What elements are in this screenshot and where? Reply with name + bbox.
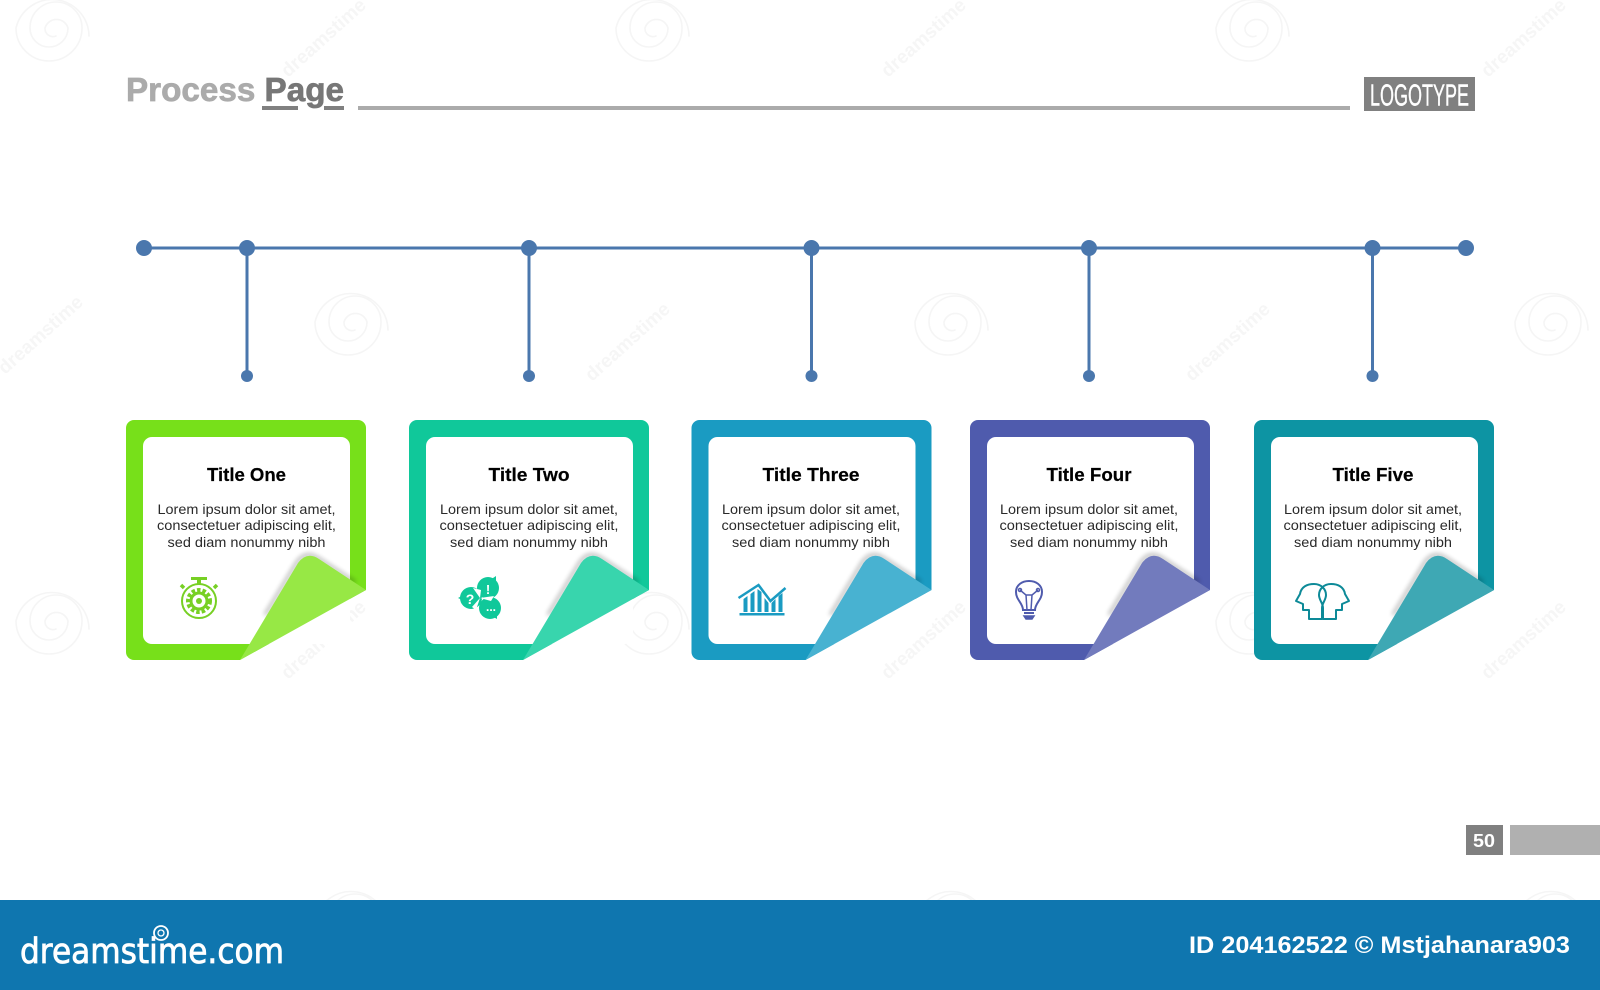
card 3 <box>692 420 932 660</box>
footer credit: ID 204162522 © Mstjahanara903 <box>1189 932 1570 959</box>
card text <box>722 501 900 550</box>
card text <box>440 501 618 550</box>
inner panel <box>1271 437 1478 644</box>
start dot <box>136 240 152 256</box>
icon: speech bubbles: ... <box>486 600 496 614</box>
card text <box>1000 501 1178 550</box>
connector 1 <box>239 240 255 382</box>
inner panel <box>708 437 916 644</box>
title: Process Page: Process Page <box>126 71 344 108</box>
icon: speech bubbles: ! <box>486 582 490 597</box>
connector 4 <box>1081 240 1097 382</box>
card 5 <box>1254 420 1494 660</box>
fold shadow <box>265 555 355 615</box>
watermark pattern: dreamstime <box>877 597 971 684</box>
fold shadow <box>548 555 638 615</box>
card title: Title Three <box>762 465 860 485</box>
page number bar <box>1510 825 1600 855</box>
fold shadow <box>1109 555 1199 615</box>
frame <box>970 420 1210 660</box>
title underline <box>262 106 344 110</box>
page fold <box>240 556 366 660</box>
card text <box>1284 501 1462 550</box>
page fold <box>1368 556 1494 660</box>
card text: consectetuer adipiscing elit, <box>1284 517 1462 533</box>
card text: sed diam nonummy nibh <box>732 534 890 550</box>
inner panel <box>426 437 633 644</box>
watermark pattern: dreamstime <box>1477 597 1571 684</box>
card text: Lorem ipsum dolor sit amet, <box>440 501 618 517</box>
card text <box>157 501 336 550</box>
logotype badge <box>1364 77 1475 112</box>
card text: Lorem ipsum dolor sit amet, <box>158 501 336 517</box>
card title: Title Two <box>488 465 570 485</box>
timeline <box>136 240 1474 382</box>
card text: sed diam nonummy nibh <box>1010 534 1168 550</box>
main horizontal line <box>144 246 1466 250</box>
card text: sed diam nonummy nibh <box>168 534 326 550</box>
icon: speech bubbles: ? <box>466 591 474 607</box>
watermark pattern: dreamstime <box>277 597 371 684</box>
card text: Lorem ipsum dolor sit amet, <box>722 501 900 517</box>
inner panel <box>143 437 350 644</box>
card text: consectetuer adipiscing elit, <box>440 517 618 533</box>
icon: light bulb <box>1016 581 1042 619</box>
connector 5 <box>1364 240 1380 382</box>
fold shadow <box>1393 555 1483 615</box>
connector 3 <box>804 240 820 382</box>
icon: two heads <box>1296 584 1349 619</box>
icon: stopwatch <box>181 577 217 618</box>
connector 2 <box>521 240 537 382</box>
card text: consectetuer adipiscing elit, <box>722 517 900 533</box>
frame <box>409 420 649 660</box>
card text: consectetuer adipiscing elit, <box>157 517 336 533</box>
footer logo: dreamstime.com <box>20 932 284 972</box>
card 4 <box>970 420 1210 660</box>
card text: sed diam nonummy nibh <box>1294 534 1452 550</box>
frame <box>1254 420 1494 660</box>
header <box>126 71 1475 112</box>
card text: sed diam nonummy nibh <box>450 534 608 550</box>
icon: chart <box>738 585 786 616</box>
logotype badge: LOGOTYPE <box>1370 78 1469 112</box>
page fold <box>523 556 649 660</box>
frame <box>692 420 932 660</box>
card title: Title Five <box>1332 465 1414 485</box>
page fold <box>1084 556 1210 660</box>
card 2 <box>409 420 649 660</box>
card text: consectetuer adipiscing elit, <box>1000 517 1178 533</box>
page number <box>1466 825 1503 855</box>
page fold <box>806 556 932 660</box>
end dot <box>1458 240 1474 256</box>
card title: Title Four <box>1046 465 1132 485</box>
header rule <box>358 106 1350 110</box>
footer band <box>0 900 1600 990</box>
card text: Lorem ipsum dolor sit amet, <box>1284 501 1462 517</box>
card title: Title One <box>207 465 286 485</box>
inner panel <box>987 437 1194 644</box>
watermark pattern: dreamstime <box>1181 299 1275 386</box>
card text: Lorem ipsum dolor sit amet, <box>1000 501 1178 517</box>
icon: speech bubbles <box>458 576 501 619</box>
frame <box>126 420 366 660</box>
fold shadow <box>830 555 920 615</box>
watermark pattern: dreamstime <box>581 299 675 386</box>
card 1 <box>126 420 366 660</box>
page number: 50 <box>1473 831 1495 851</box>
